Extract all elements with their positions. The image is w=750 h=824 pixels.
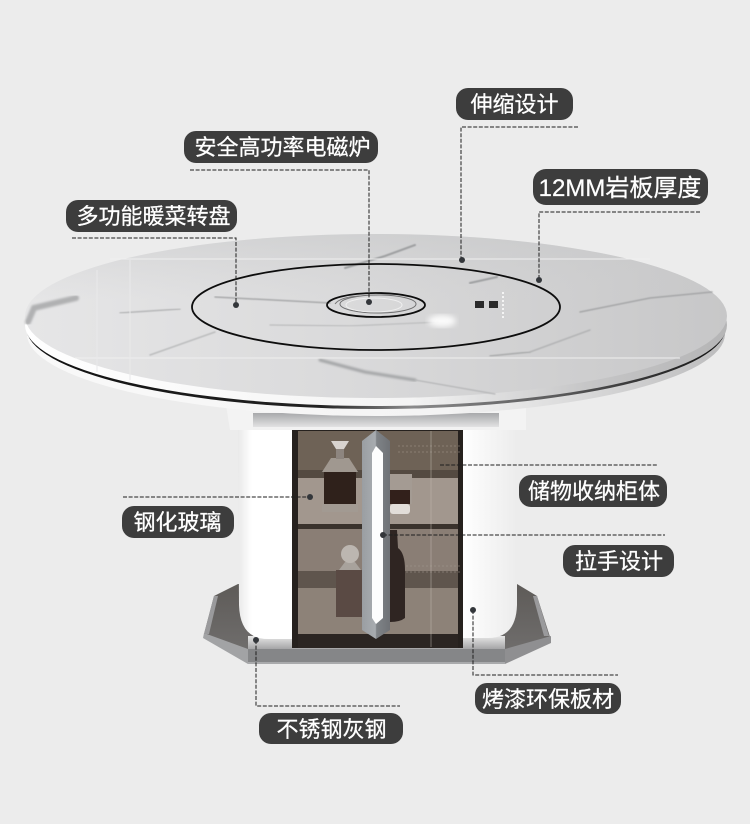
callout: stainless steel <box>253 637 403 744</box>
callout: lacquer panel <box>470 607 621 714</box>
callout: stainless steel: 不锈钢灰钢 <box>276 717 387 742</box>
light reflection <box>428 315 456 327</box>
callout: storage cabinet <box>440 465 667 507</box>
dark rim line <box>26 245 726 409</box>
base: stainless steel plinth <box>203 584 551 664</box>
white cabinet body right <box>461 430 517 638</box>
callout: tempered glass <box>122 494 313 538</box>
turntable ring <box>192 264 560 350</box>
callout: slab thickness <box>533 169 708 283</box>
callout: lacquer panel: 烤漆环保板材 <box>482 687 614 712</box>
surface shading <box>25 234 727 398</box>
door handle <box>362 430 390 639</box>
lower white plate <box>27 252 725 416</box>
glass with contents <box>390 474 412 514</box>
callout: handle design: 拉手设计 <box>575 549 663 574</box>
white cabinet body left <box>238 430 293 639</box>
callout: warming turntable: 多功能暖菜转盘 <box>76 204 231 229</box>
decanter top <box>322 441 358 512</box>
decanter bottom <box>336 545 364 617</box>
callout: telescopic design: 伸缩设计 <box>470 92 559 117</box>
control icons <box>475 292 503 318</box>
callout: induction cooker <box>184 131 378 305</box>
callout: handle design <box>380 532 674 577</box>
door watermark marks <box>398 431 462 647</box>
wine bottle <box>390 530 405 622</box>
marble veins <box>28 245 712 394</box>
callout: warming turntable <box>66 200 239 308</box>
surface highlights <box>75 259 680 380</box>
callout: tempered glass: 钢化玻璃 <box>133 510 222 535</box>
induction cooker ring <box>327 293 425 317</box>
callout: slab thickness: 12MM岩板厚度 <box>539 175 701 202</box>
glass door <box>292 430 463 648</box>
callout: induction cooker: 安全高功率电磁炉 <box>194 135 371 160</box>
callout: storage cabinet: 储物收纳柜体 <box>528 479 660 504</box>
silver edge <box>25 244 727 406</box>
table top <box>25 234 727 416</box>
table support under top <box>226 405 526 430</box>
marble surface <box>25 234 727 398</box>
callout: telescopic design <box>456 88 578 263</box>
shelf interior <box>298 431 458 648</box>
storage cabinet <box>238 430 517 648</box>
